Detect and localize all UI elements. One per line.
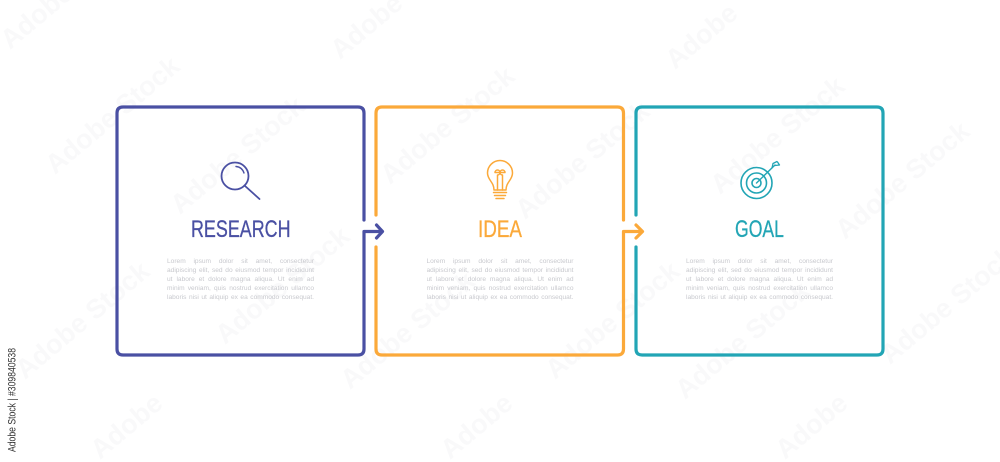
text block: idea: laboris nisi ut aliquip ex ea commodo consequat. — [426, 294, 574, 301]
watermark: Adobe Stock — [375, 60, 521, 190]
watermark: Adobe Stock — [510, 95, 656, 225]
icon: magnifying glass — [222, 162, 260, 199]
text block: idea: adipiscing elit, sed do eiusmod tempor incididunt — [426, 267, 574, 274]
text block: research: ut labore et dolore magna aliqua. Ut enim ad — [167, 276, 314, 283]
watermark: Adobe Stock — [10, 255, 156, 385]
watermark: Adobe Stock — [210, 220, 356, 350]
panel: idea — [376, 107, 642, 355]
text block: goal: adipiscing elit, sed do eiusmod tempor incididunt — [686, 267, 833, 274]
icon: light bulb — [488, 160, 512, 198]
text block: research: minim veniam, quis nostrud exercitation ullamco — [167, 285, 314, 292]
frame: goal — [636, 107, 883, 355]
text block: research: adipiscing elit, sed do eiusmod tempor incididunt — [167, 267, 314, 274]
text block: goal: Lorem ipsum dolor sit amet, consectetur — [686, 258, 833, 265]
watermark: Adobe Stock — [705, 70, 851, 200]
panel: goal — [636, 107, 883, 355]
text block: idea: Lorem ipsum dolor sit amet, consectetur — [426, 258, 574, 265]
text block: idea: minim veniam, quis nostrud exercitation ullamco — [426, 285, 574, 292]
watermark: Adobe Stock — [540, 255, 686, 385]
text block: goal: laboris nisi ut aliquip ex ea commodo consequat. — [686, 294, 833, 301]
watermark: Adobe Stock — [335, 265, 481, 395]
text block: goal: ut labore et dolore magna aliqua. Ut enim ad — [686, 276, 833, 283]
icon: target — [741, 162, 780, 198]
text block: idea — [426, 257, 574, 302]
heading: research: RESEARCH — [191, 216, 290, 243]
watermark: Adobe Stock — [165, 90, 311, 220]
heading: goal: GOAL — [735, 216, 784, 243]
frame and arrow: research — [117, 107, 382, 355]
text block: research: laboris nisi ut aliquip ex ea commodo consequat. — [167, 294, 314, 301]
stock id label: Adobe Stock | #309840538 — [6, 348, 18, 452]
text block: idea: ut labore et dolore magna aliqua. Ut enim ad — [426, 276, 574, 283]
watermark: Adobe Stock — [40, 50, 186, 180]
text block: research — [167, 257, 314, 302]
watermark: Adobe Stock — [670, 275, 816, 405]
text block: research: Lorem ipsum dolor sit amet, consectetur — [167, 258, 314, 265]
heading: idea: IDEA — [478, 216, 522, 243]
text block: goal — [686, 257, 833, 302]
panel: research — [117, 107, 382, 355]
text block: goal: minim veniam, quis nostrud exercitation ullamco — [686, 285, 833, 292]
frame and arrow: idea — [376, 107, 642, 355]
watermark: Adobe Stock — [830, 115, 976, 245]
